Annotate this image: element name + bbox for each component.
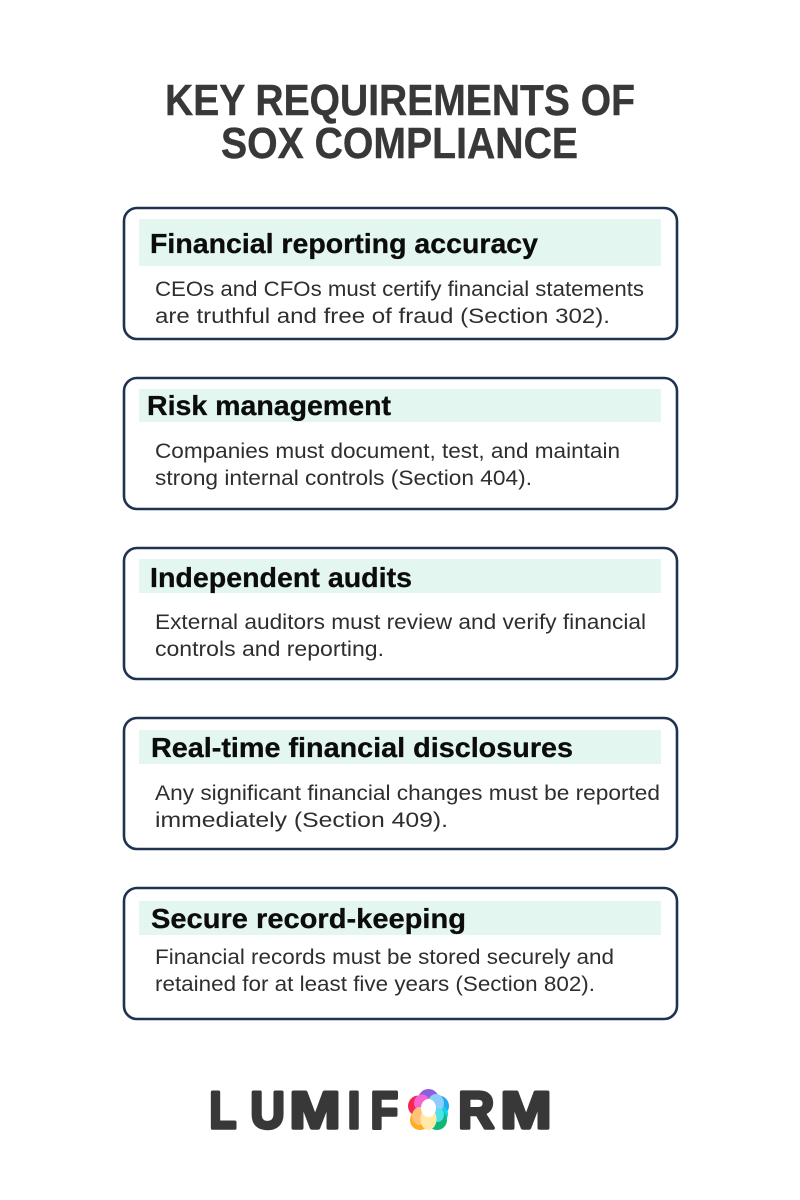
- text: financial reporting description: CEOs and CFOs must certify financial statements: [155, 277, 644, 301]
- panel: financial reporting accuracy: [124, 208, 677, 339]
- title: KEY REQUIREMENTS OF: [165, 76, 635, 125]
- text: risk management description: Companies must document, test, and maintain: [155, 439, 620, 463]
- heading: financial reporting accuracy: Financial reporting accuracy: [150, 228, 538, 259]
- text: secure record-keeping description: retained for at least five years (Section 802).: [155, 972, 595, 996]
- logo: Lumiform: R: [458, 1082, 494, 1140]
- heading: real-time financial disclosures: Real-time financial disclosures: [151, 732, 573, 763]
- text: financial reporting description: [155, 277, 644, 328]
- heading: secure record-keeping: Secure record-keeping: [151, 903, 466, 934]
- text: real-time disclosures description: immediately (Section 409).: [155, 808, 448, 832]
- text: financial reporting description: are truthful and free of fraud (Section 302).: [155, 304, 610, 328]
- logo: Lumiform: M: [290, 1082, 340, 1140]
- panel: real-time financial disclosures: [124, 718, 677, 849]
- panel: secure record-keeping: [124, 888, 677, 1019]
- logo: Lumiform: I: [348, 1082, 360, 1140]
- text: secure record-keeping description: [155, 945, 614, 996]
- logo: Lumiform: [209, 1082, 552, 1140]
- logo: Lumiform: F: [371, 1082, 398, 1140]
- heading: independent audits: Independent audits: [150, 562, 412, 593]
- logo: Lumiform: M: [500, 1082, 552, 1140]
- panel: independent audits: [124, 548, 677, 679]
- text: independent audits description: [155, 610, 646, 661]
- icon: multicolour flower: [408, 1089, 449, 1130]
- text: independent audits description: controls and reporting.: [155, 637, 384, 661]
- text: secure record-keeping description: Financial records must be stored securely and: [155, 945, 614, 969]
- text: independent audits description: External auditors must review and verify financial: [155, 610, 646, 634]
- text: real-time disclosures description: Any significant financial changes must be reported: [155, 781, 660, 805]
- logo: Lumiform: L: [209, 1082, 236, 1140]
- title: [165, 76, 635, 168]
- logo: Lumiform: U: [250, 1082, 285, 1140]
- text: risk management description: strong internal controls (Section 404).: [155, 466, 532, 490]
- heading: risk management: Risk management: [147, 390, 391, 421]
- title: SOX COMPLIANCE: [221, 119, 578, 168]
- text: risk management description: [155, 439, 620, 490]
- panel: risk management: [124, 378, 677, 509]
- text: real-time disclosures description: [155, 781, 660, 832]
